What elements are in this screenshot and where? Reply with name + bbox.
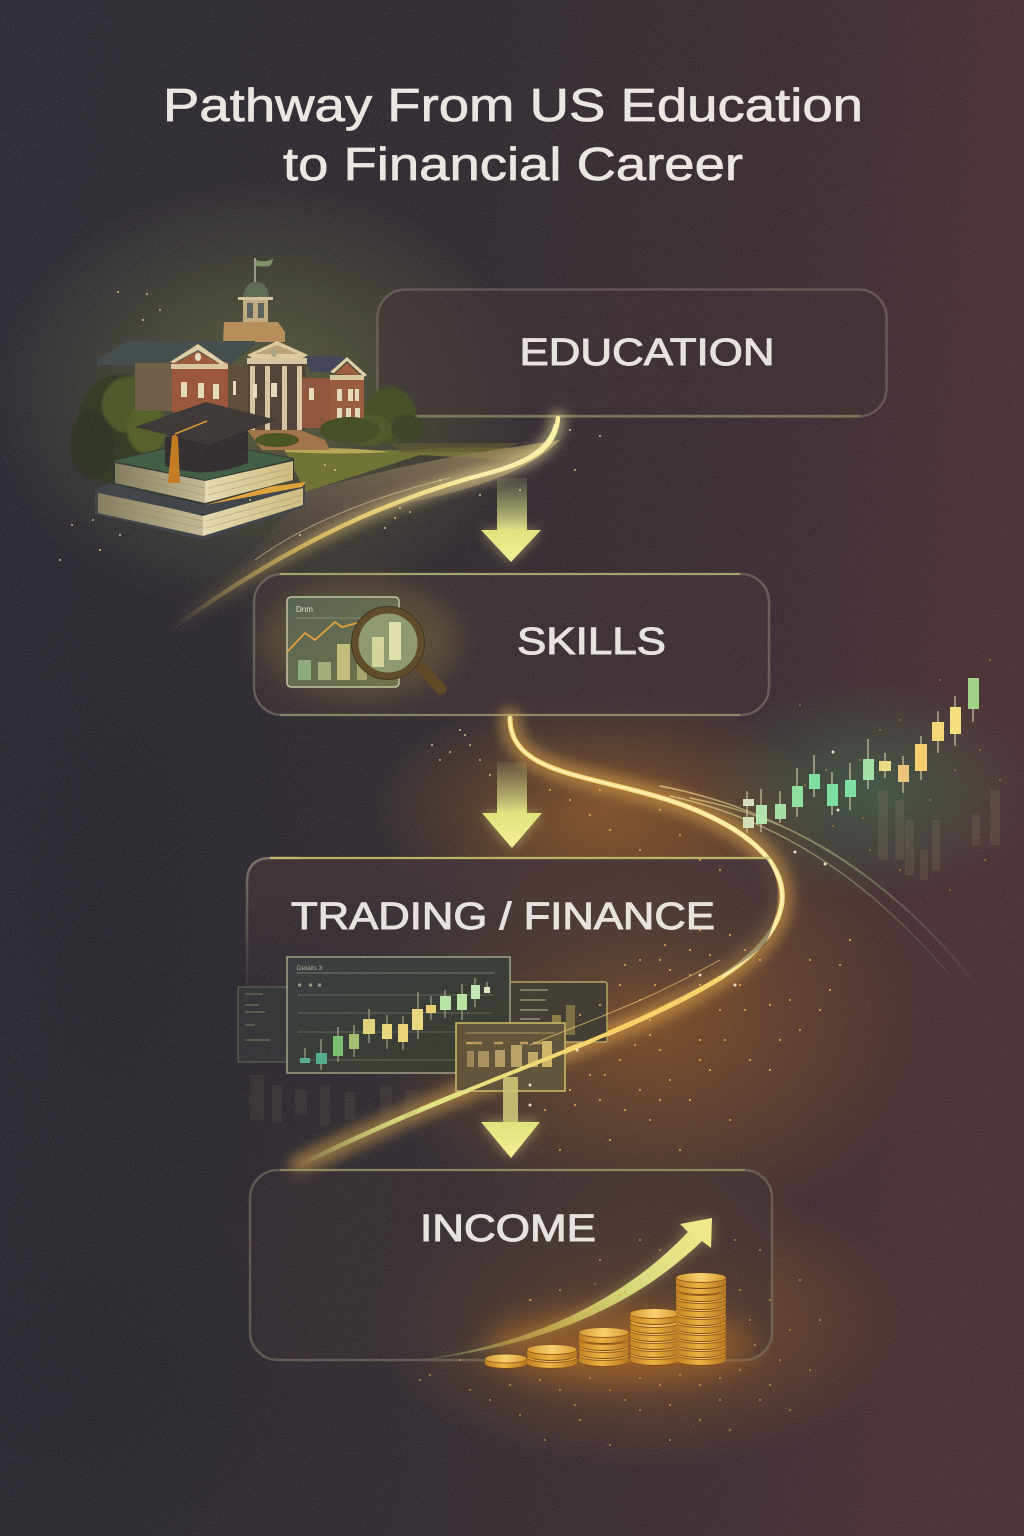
title: Pathway From US Education — [163, 79, 863, 131]
front data screen — [456, 1023, 565, 1091]
flag and pole — [255, 258, 273, 282]
wisps toward market chart — [660, 786, 990, 1000]
faded background bars — [878, 790, 1000, 880]
building — [97, 258, 380, 450]
illustration: campus with books and graduation cap — [70, 258, 560, 600]
foreground glow streak over screens — [300, 960, 720, 1165]
right back screen — [508, 982, 607, 1042]
books — [95, 440, 306, 540]
icon: rising arrow — [420, 1218, 712, 1360]
arrow: skills to trading — [482, 762, 542, 848]
sparkle particles — [60, 292, 1000, 1445]
title — [163, 79, 863, 190]
panel: skills — [254, 574, 769, 716]
panel: education — [378, 290, 886, 416]
road — [200, 440, 560, 600]
icon: chart under magnifying glass: Dnm — [296, 605, 313, 614]
glow path: education to skills — [170, 418, 558, 630]
arrow: education to skills — [481, 478, 541, 562]
panel: trading / finance — [238, 858, 778, 1091]
panel: income — [250, 1170, 772, 1381]
main chart screen: Details 3 — [297, 965, 323, 972]
icon: chart under magnifying glass — [260, 580, 460, 700]
label: trading / finance: TRADING / FINANCE — [291, 896, 715, 938]
trees behind building — [70, 374, 423, 486]
glow path: skills to trading and income — [300, 718, 990, 1165]
left back screen — [238, 987, 288, 1062]
title: to Financial Career — [283, 138, 743, 190]
candlestick market chart — [743, 678, 1000, 880]
label: skills: SKILLS — [517, 621, 666, 663]
lawn — [285, 448, 540, 492]
faint data bars under screens — [250, 1075, 417, 1125]
arrow: trading to income — [481, 1077, 540, 1158]
main chart screen — [287, 957, 510, 1073]
label: education: EDUCATION — [520, 332, 774, 374]
icon: coin stacks — [485, 1273, 755, 1381]
label: income: INCOME — [420, 1208, 596, 1250]
graduation cap — [135, 402, 277, 483]
